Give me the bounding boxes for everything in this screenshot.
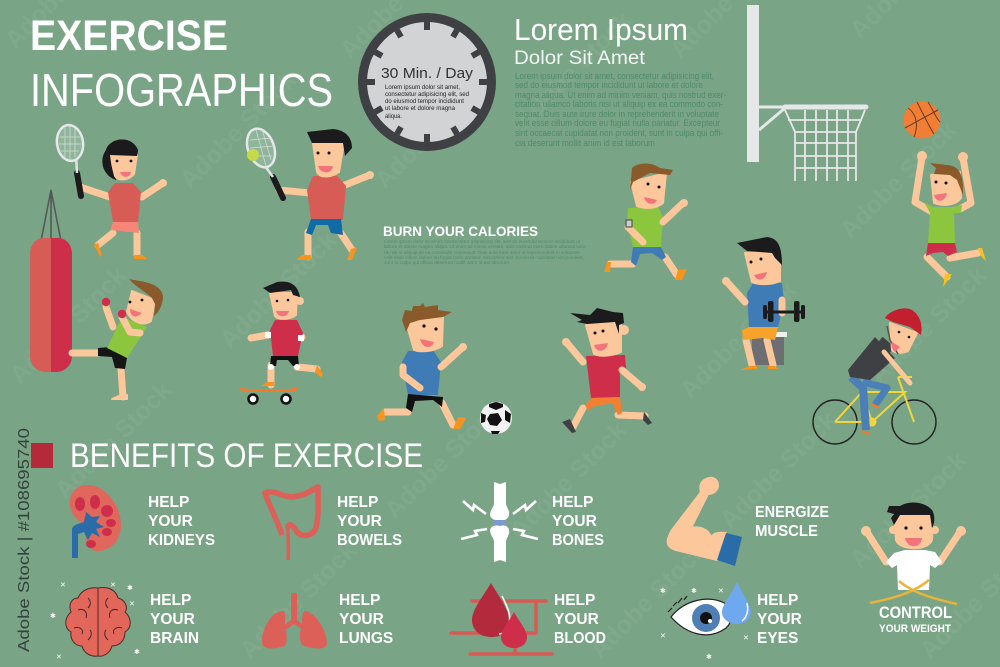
icon: brain [50, 582, 140, 661]
label: kidneys [148, 494, 215, 549]
label: eyes: HELP [757, 592, 798, 609]
text block: lorem paragraph: citation ullamco laboris nisi ut aliquip ex ea commodo con- [515, 99, 723, 109]
icon: flexed arm [668, 478, 742, 566]
label: bowels: HELP [337, 494, 378, 511]
figure: cyclist [813, 308, 936, 444]
text: Adobe Stock [49, 376, 177, 504]
label: control your weight: CONTROL [879, 604, 952, 622]
heading: burn your calories: sunt in culpa qui officia deserunt mollit anim id est laborum [384, 260, 509, 265]
heading: Lorem Ipsum: Lorem Ipsum [514, 12, 688, 47]
label: bones: YOUR [552, 513, 597, 530]
figure: skateboarder [239, 282, 323, 404]
icon: basketball [904, 102, 940, 138]
text: Adobe Stock [714, 406, 842, 534]
heading: burn your calories: ris nisi ut aliquip ex ea commodo consequat. Duis aute irure dolor in reprehenderit in voluptate [384, 250, 580, 255]
label: kidneys: YOUR [148, 513, 193, 530]
label: eyes: YOUR [757, 611, 802, 628]
figure: boy playing soccer, blue shirt [377, 303, 466, 429]
label: energize muscle: MUSCLE [755, 523, 818, 540]
figure: woman with tennis racket [55, 123, 166, 259]
clock: 30 min per day [358, 13, 496, 151]
heading: burn your calories: Lorem ipsum dolor sit amet, consectetur adipisicing elit, sed do eiusmod tempor incididunt ut [384, 239, 581, 244]
label: control your weight [879, 604, 952, 635]
figure: kickboxer [72, 279, 163, 399]
text block: lorem paragraph: velit esse cillum dolore eu fugiat nulla pariatur. Excepteur [515, 118, 720, 128]
icon: kidney [70, 485, 121, 558]
label: bowels: YOUR [337, 513, 382, 530]
title [30, 12, 333, 116]
label: brain [150, 592, 199, 647]
text: Adobe Stock [369, 66, 497, 194]
title: EXERCISE [30, 12, 228, 60]
text: Adobe Stock [844, 446, 972, 574]
clock: 30 min per day: Lorem ipsum dolor sit amet, [385, 84, 460, 91]
label: eyes: EYES [757, 630, 798, 647]
label: bowels: BOWELS [337, 532, 402, 549]
clock: 30 min per day: ut labore et dolore magna [385, 105, 455, 112]
icon: punching bag [30, 190, 72, 372]
label: brain: HELP [150, 592, 191, 609]
icon: bone joint [461, 482, 538, 562]
icon: eye with drop: ✕ [743, 635, 749, 642]
icon: brain: ✕ [110, 582, 116, 589]
label: bones: BONES [552, 532, 604, 549]
figure: jumping basketball player [915, 152, 986, 287]
heading: burn your calories: labore et dolore magna aliqua. Ut enim ad minim veniam, quis nostrud exercitation ullamco labo- [384, 244, 587, 249]
icon: brain: ✱ [50, 612, 56, 620]
text: Adobe Stock [509, 6, 637, 134]
label: lungs: LUNGS [339, 630, 393, 647]
label: brain: BRAIN [150, 630, 199, 647]
label: blood [554, 592, 606, 647]
heading: burn your calories [383, 223, 587, 265]
label: lungs: HELP [339, 592, 380, 609]
icon: eye with drop: ✱ [660, 587, 666, 595]
text: Adobe Stock [234, 536, 362, 664]
label: blood: BLOOD [554, 630, 606, 647]
clock: 30 min per day: aliqua. [385, 113, 402, 120]
label: blood: YOUR [554, 611, 599, 628]
icon: red bullet square [31, 443, 53, 468]
icon: brain: ✱ [134, 648, 140, 656]
icon: brain: ✕ [56, 654, 62, 661]
icon: basketball hoop [747, 5, 866, 181]
text: Adobe Stock [379, 396, 507, 524]
icon: lungs [262, 593, 327, 649]
watermark: vertical stock id: Adobe Stock | #108695740 [16, 428, 33, 652]
figure: boy playing soccer, red shirt [562, 308, 652, 433]
text: Adobe Stock [4, 261, 132, 389]
icon: eye with drop: ✕ [718, 588, 724, 595]
text: Adobe Stock [674, 276, 802, 404]
text: Adobe Stock [864, 261, 992, 389]
label: blood: HELP [554, 592, 595, 609]
text: Adobe Stock [504, 416, 632, 544]
icon: brain: ✕ [129, 601, 135, 608]
heading: burn your calories: BURN YOUR CALORIES [383, 223, 538, 239]
figure: man with measuring tape [862, 503, 965, 604]
label: brain: YOUR [150, 611, 195, 628]
label: bowels [337, 494, 402, 549]
heading: burn your calories: velit esse cillum dolore eu fugiat nulla pariatur. Excepteur sint occaecat cupidatat non proident, [384, 255, 584, 260]
text block: lorem paragraph [515, 71, 726, 148]
heading: Lorem Ipsum [514, 12, 688, 69]
icon: soccer ball [480, 402, 512, 434]
icon: blood drops and pipes [451, 583, 552, 654]
text: Adobe Stock [174, 66, 302, 194]
text block: lorem paragraph: sed do eiusmod tempor incididunt ut labore et dolore [515, 80, 703, 90]
text: Adobe Stock [214, 226, 342, 354]
clock: 30 min per day: 30 Min. / Day [381, 65, 474, 82]
text: Adobe Stock [834, 116, 962, 244]
figure: green shirt runner [604, 163, 687, 280]
text block: lorem paragraph: Lorem ipsum dolor sit amet, consectetur adipisicing elit, [515, 71, 714, 81]
icon: brain: ✱ [127, 584, 133, 592]
text block: lorem paragraph: magna aliqua. Ut enim ad minim veniam, quis nostrud exer- [515, 90, 726, 100]
label: bones: HELP [552, 494, 593, 511]
icon: eye with drop: ✱ [706, 653, 712, 661]
heading: benefits of exercise: BENEFITS OF EXERCISE [70, 437, 423, 475]
text block: lorem paragraph: sint occaecat cupidatat non proident, sunt in culpa qui offi- [515, 128, 723, 138]
text block: lorem paragraph: cia deserunt mollit anim id est laborum [515, 138, 655, 148]
text: Adobe Stock [584, 536, 712, 664]
label: eyes [757, 592, 802, 647]
label: kidneys: HELP [148, 494, 189, 511]
icon: eye with drop: ✕ [660, 633, 666, 640]
figure: man lifting dumbbell [723, 237, 805, 370]
figure: man with tennis racket [242, 125, 373, 260]
label: energize muscle [755, 504, 829, 540]
icon: bowel [265, 487, 318, 560]
title: INFOGRAPHICS [30, 64, 333, 116]
icon: eye with drop [660, 582, 751, 661]
icon: eye with drop: ✱ [691, 587, 697, 595]
text block: lorem paragraph: sequat. Duis aute irure dolor in reprehenderit in voluptate [515, 109, 719, 119]
heading: Lorem Ipsum: Dolor Sit Amet [514, 48, 646, 69]
label: lungs [339, 592, 393, 647]
clock: 30 min per day: do eiusmod tempor incididunt [385, 98, 464, 105]
label: energize muscle: ENERGIZE [755, 504, 829, 521]
label: kidneys: KIDNEYS [148, 532, 215, 549]
label: lungs: YOUR [339, 611, 384, 628]
icon: brain: ✕ [60, 582, 66, 589]
label: bones [552, 494, 604, 549]
clock: 30 min per day: consectetur adipisicing elit, sed [385, 91, 469, 98]
label: control your weight: YOUR WEIGHT [879, 623, 951, 635]
